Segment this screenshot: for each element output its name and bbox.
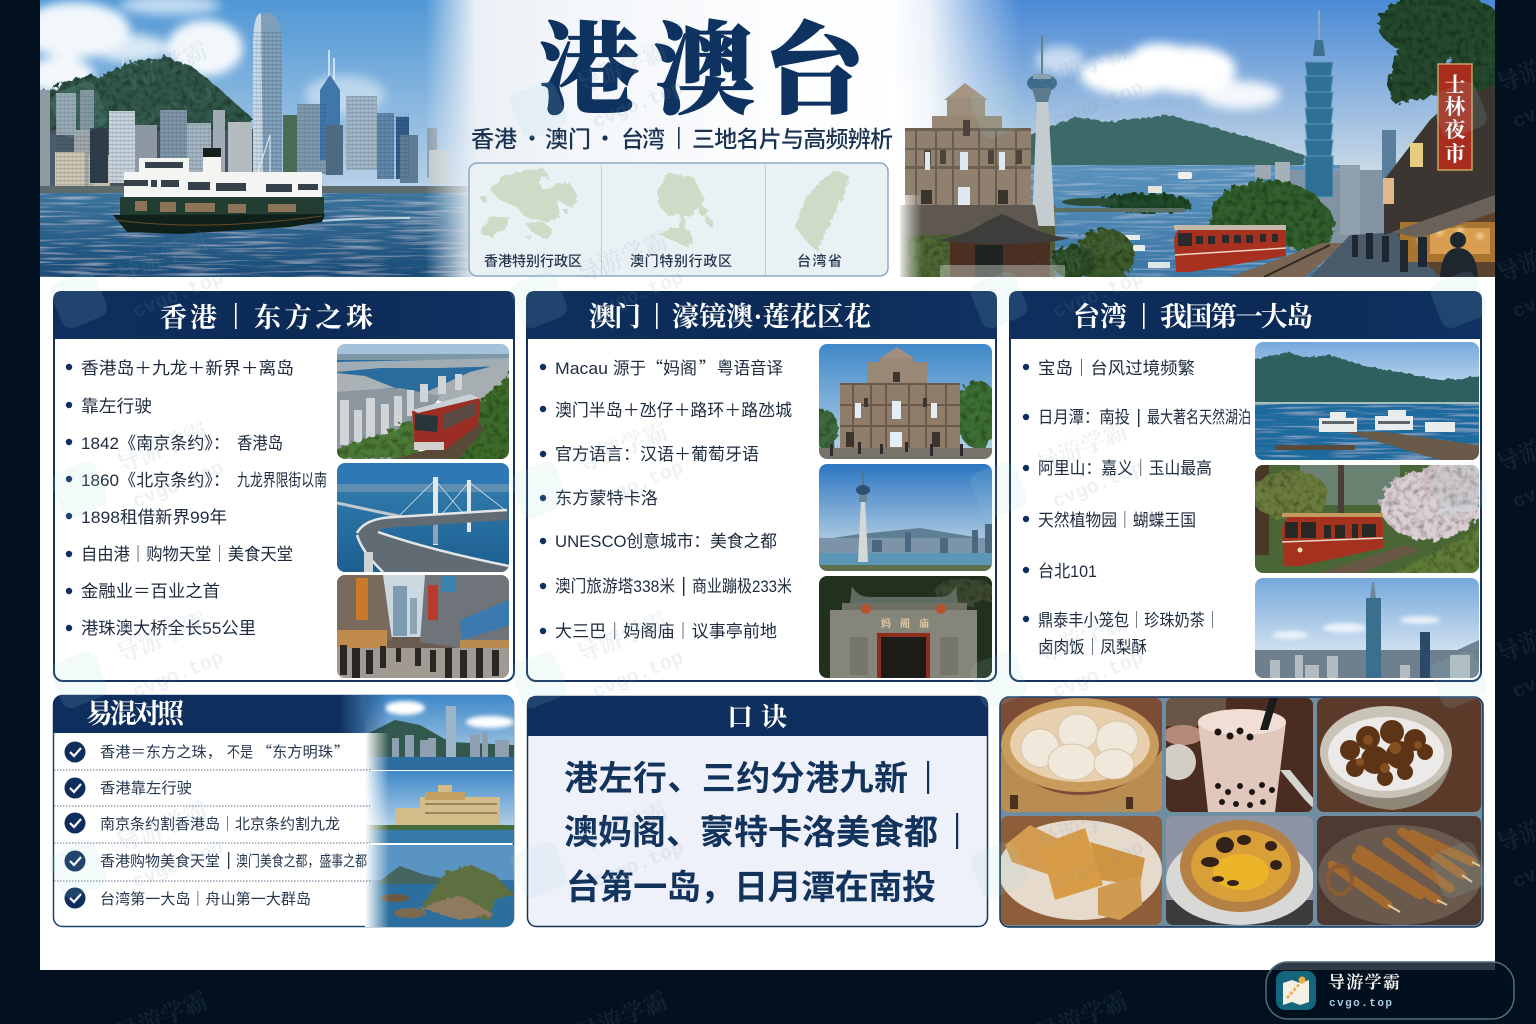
mnemonic lines — [564, 760, 958, 907]
comparison photos — [53, 695, 514, 927]
subtitle: 香港 — [471, 126, 517, 152]
row: 香港＝东方之珠: 香港＝东方之珠， — [100, 744, 222, 761]
watermark: 导游学霸 — [1033, 228, 1132, 289]
food: grilled squid skewers — [1317, 816, 1482, 925]
watermark: 导游学霸 — [573, 608, 672, 669]
photo: Peak Tram — [337, 344, 515, 465]
bullet list: Macau: ” — [699, 354, 716, 379]
map: Taiwan — [795, 170, 850, 252]
mnemonic header — [527, 696, 988, 736]
photo: A-Ma Temple gate — [819, 576, 995, 678]
panel header: Macau: 澳门 — [589, 302, 641, 332]
food: xiaolongbao — [1000, 698, 1162, 812]
subtitle — [471, 126, 893, 152]
bullet list: Macau: Macau — [555, 359, 608, 378]
map label: Taiwan: 台湾省 — [797, 253, 842, 269]
bullet list: Taiwan: 天然植物园｜蝴蝶王国 — [1038, 511, 1196, 530]
watermark: cvgo.top — [1050, 267, 1147, 324]
watermark: cvgo.top — [130, 837, 227, 894]
subtitle: 三地名片与高频辨析 — [692, 126, 893, 152]
row: 美食: 香港购物美食天堂 — [100, 853, 220, 870]
row: 香港＝东方之珠 — [64, 741, 349, 762]
bullet list: Taiwan — [1023, 359, 1251, 657]
row: 香港靠左行驶 — [64, 778, 192, 798]
map label: Hong Kong: 香港特别行政区 — [484, 253, 582, 269]
food: bubble tea — [1160, 697, 1313, 812]
watermark: 导游学霸 — [1033, 38, 1132, 99]
title: 港 — [539, 16, 639, 127]
bullet list: Macau: 粤语音译 — [717, 359, 783, 378]
row: 香港＝东方之珠: 东方明珠 — [272, 744, 333, 761]
bullet list: Macau: 澳门旅游塔338米 — [555, 577, 675, 596]
bullet list: Macau: 商业蹦极233米 — [692, 577, 792, 596]
photo: waterfront building — [365, 771, 514, 843]
panel: Macau — [526, 291, 1000, 681]
row: 香港＝东方之珠: 不是 — [227, 744, 253, 761]
watermark: cvgo.top — [130, 647, 227, 704]
watermark: 导游学霸 — [573, 418, 672, 479]
Star Ferry — [113, 135, 325, 234]
bullet list: Macau: 妈阁 — [663, 359, 697, 378]
photo: Taipei skyline — [1255, 578, 1479, 678]
photo: Sun Moon Lake — [1250, 342, 1485, 460]
bullet list: Hong Kong: 靠左行驶 — [81, 397, 152, 416]
header band — [53, 695, 389, 733]
panel header: Hong Kong: 东方之珠 — [254, 303, 373, 333]
photo: Victoria Harbour skyline and Star Ferry — [20, 0, 485, 277]
subtitle: 台湾 — [621, 126, 665, 152]
map: Macau — [657, 173, 714, 247]
bullet list: Taiwan: 宝岛｜台风过境频繁 — [1038, 359, 1195, 378]
Ruins of St Paul's — [900, 83, 1040, 235]
bullet list: Hong Kong: 金融业＝百业之首 — [81, 582, 220, 601]
sign: 士林夜市: 林 — [1444, 95, 1466, 119]
photo: Macau ruins, Sun Moon Lake, Taipei 101 and Shilin night market — [890, 0, 1510, 281]
panel: mnemonic — [527, 696, 988, 926]
bullet list: Macau: UNESCO创意城市：美食之都 — [555, 532, 777, 551]
watermark: 导游学霸 — [113, 228, 212, 289]
watermark: 导游学霸 — [113, 38, 212, 99]
watermark: cvgo.top — [590, 457, 687, 514]
tree canopy top right — [1378, 0, 1510, 105]
row: 香港＝东方之珠: ” — [334, 741, 349, 762]
bushes — [908, 229, 1135, 281]
watermark: cvgo.top — [590, 837, 687, 894]
watermark: cvgo.top — [590, 77, 687, 134]
panel: Hong Kong — [53, 291, 515, 681]
panel header: Taiwan: 台湾 — [1073, 301, 1128, 332]
photo: Zhoushan islands — [365, 845, 514, 927]
panel header: Macau: 濠镜澳·莲花区花 — [672, 302, 871, 332]
panel: Taiwan — [1009, 291, 1491, 681]
panel: food photos — [998, 697, 1483, 927]
mnemonic header: 口 诀 — [727, 703, 787, 732]
ground under ruins — [900, 205, 1055, 277]
watermark: cvgo.top — [130, 457, 227, 514]
Taipei 101 — [1305, 10, 1333, 197]
logo url: cvgo.top — [1329, 998, 1392, 1010]
watermark: 导游学霸 — [113, 418, 212, 479]
row: 美食: 澳门美食之都，盛事之都 — [236, 853, 367, 870]
bullet list: Macau: 东方蒙特卡洛 — [555, 489, 658, 508]
bullet list: Hong Kong: 1898租借新界99年 — [81, 508, 227, 527]
bullet list: Taiwan: 最大著名天然湖泊 — [1147, 408, 1251, 427]
mnemonic lines: 台第一岛，日月潭在南投 — [566, 869, 936, 907]
left fades — [365, 733, 389, 927]
watermark: 导游学霸 — [573, 38, 672, 99]
logo text: 导游学霸 — [1328, 973, 1400, 992]
bullet list: Macau: 官方语言：汉语＋葡萄牙语 — [555, 445, 759, 464]
watermark: 导游学霸 — [573, 228, 672, 289]
title: 台 — [764, 16, 870, 127]
watermark: cvgo.top — [590, 267, 687, 324]
photo: skyline — [330, 695, 514, 770]
map strip — [469, 163, 888, 276]
sign: 士林夜市 — [1438, 64, 1472, 170]
food: braised pork rice — [1317, 698, 1481, 812]
mnemonic lines: 港左行、三约分港九新 — [564, 760, 908, 798]
bullet list: Hong Kong: 香港岛＋九龙＋新界＋离岛 — [81, 359, 294, 378]
photo: A-Ma Temple gate: 妈阁庙 — [881, 617, 929, 630]
distant Taipei city — [1255, 130, 1396, 250]
sign: 士林夜市: 市 — [1444, 142, 1466, 166]
bullet list: Hong Kong: 1860《北京条约》： — [81, 471, 230, 490]
photo: Macau Tower — [819, 464, 992, 571]
icon: folded map with route — [1276, 971, 1316, 1010]
bullet list: Macau: “ — [646, 354, 663, 379]
map label: Macau: 澳门特别行政区 — [630, 253, 732, 269]
title — [539, 16, 870, 127]
sign: 士林夜市: 士 — [1444, 73, 1466, 97]
map: Hong Kong — [480, 168, 578, 240]
photo: Ruins of St Paul's — [814, 344, 1000, 459]
Macau Tower — [1027, 35, 1057, 226]
watermark: 导游学霸 — [1033, 418, 1132, 479]
bullet list: Hong Kong — [66, 359, 327, 638]
watermark: 导游学霸 — [1033, 608, 1132, 669]
bullet list: Taiwan: 日月潭：南投 — [1038, 408, 1130, 427]
red Alishan train — [1174, 225, 1286, 272]
watermark: 导游学霸 — [113, 798, 212, 859]
header banner — [20, 0, 1510, 281]
watermark: 导游学霸 — [113, 608, 212, 669]
panel header: Hong Kong — [53, 291, 515, 339]
watermark: 导游学霸 — [573, 798, 672, 859]
subtitle: 澳门 — [545, 126, 591, 152]
watermark: cvgo.top — [590, 647, 687, 704]
trees mid — [1209, 180, 1335, 251]
title: 澳 — [655, 16, 755, 127]
bullet list: Hong Kong: 港珠澳大桥全长55公里 — [81, 619, 256, 638]
row: 香港＝东方之珠: “ — [257, 741, 272, 762]
panel header: Taiwan: 我国第一大岛 — [1160, 302, 1313, 332]
panel header: Macau — [526, 291, 997, 339]
bullet list: Hong Kong: 1842《南京条约》： — [81, 434, 230, 453]
pavilion — [936, 214, 1070, 277]
panel header: Taiwan — [1009, 291, 1482, 339]
bullet list: Hong Kong: 香港岛 — [237, 434, 283, 453]
bullet list: Macau: 大三巴｜妈阁庙｜议事亭前地 — [555, 622, 777, 641]
food: egg tart — [1166, 816, 1314, 925]
bullet list: Taiwan: 卤肉饭｜凤梨酥 — [1038, 638, 1147, 657]
header centre backdrop — [485, 0, 662, 277]
photo: Alishan train — [1255, 465, 1479, 573]
sign: 士林夜市: 夜 — [1444, 118, 1466, 142]
pedestrian street — [1310, 83, 1495, 277]
photo: Hong Kong–Zhuhai–Macau Bridge — [337, 463, 509, 572]
watermark: 导游学霸 — [1033, 798, 1132, 859]
food: pineapple cake — [998, 816, 1162, 925]
bullet list: Macau: 澳门半岛＋氹仔＋路环＋路氹城 — [555, 401, 792, 420]
island — [1055, 172, 1192, 268]
logo badge — [1266, 962, 1514, 1019]
bullet list: Hong Kong: 九龙界限街以南 — [237, 471, 327, 490]
watermark: cvgo.top — [1050, 457, 1147, 514]
row: 香港靠左行驶: 香港靠左行驶 — [100, 780, 192, 797]
watermark: cvgo.top — [1050, 837, 1147, 894]
row: 条约: 南京条约割香港岛｜北京条约割九龙 — [100, 816, 340, 833]
bullet list: Taiwan: 阿里山：嘉义｜玉山最高 — [1038, 459, 1212, 478]
panel header: Hong Kong: 香港 — [160, 303, 217, 333]
row: 第一大岛 — [64, 888, 311, 908]
bullet list: Taiwan: 台北101 — [1038, 562, 1097, 581]
row: 第一大岛: 台湾第一大岛｜舟山第一大群岛 — [100, 890, 311, 908]
watermark: cvgo.top — [1050, 647, 1147, 704]
bullet list: Taiwan: 鼎泰丰小笼包｜珍珠奶茶｜ — [1038, 611, 1220, 630]
panel: easily confused pairs — [53, 695, 514, 927]
bullet list: Macau: 源于 — [613, 359, 646, 378]
mnemonic lines: 澳妈阁、蒙特卡洛美食都 — [564, 814, 938, 852]
bullet list: Macau — [540, 354, 792, 641]
bullet list: Hong Kong: 自由港｜购物天堂｜美食天堂 — [81, 545, 293, 564]
watermark: cvgo.top — [1050, 77, 1147, 134]
watermark: cvgo.top — [130, 77, 227, 134]
watermark: cvgo.top — [130, 267, 227, 324]
row: 美食 — [64, 850, 367, 872]
header band: 易混对照 — [86, 699, 186, 729]
photo: Hong Kong street — [337, 575, 509, 678]
